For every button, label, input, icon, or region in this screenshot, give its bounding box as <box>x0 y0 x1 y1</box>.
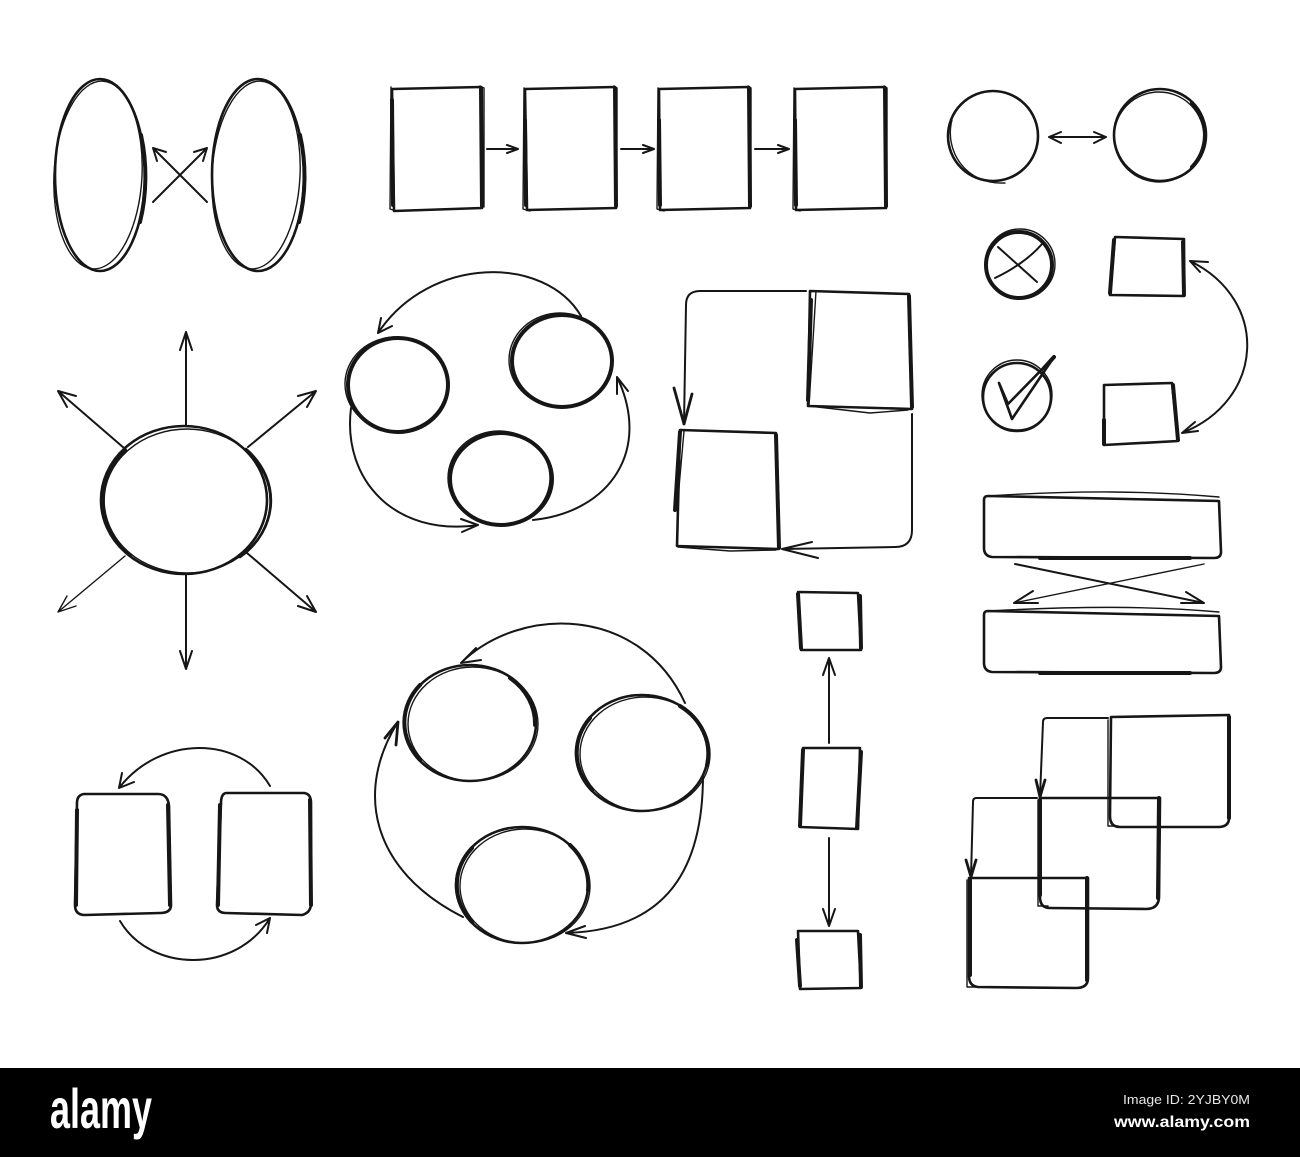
crossed arrows <box>1014 564 1204 603</box>
lower connector arrow <box>971 798 1037 877</box>
bottom box <box>797 931 861 989</box>
central oval <box>101 426 271 574</box>
middle square <box>1038 798 1160 909</box>
logo wordmark: alamy <box>50 1077 152 1140</box>
diagram: two boxes with curved arrow <box>1104 237 1247 445</box>
arrow lower right <box>247 553 316 612</box>
arrow upper left <box>58 391 124 448</box>
top square <box>1108 715 1229 827</box>
bottom square <box>967 878 1088 988</box>
left arc arrow <box>350 408 478 532</box>
website: www.alamy.com <box>1113 1114 1250 1131</box>
lower box <box>675 430 779 551</box>
step box 2 <box>523 86 617 211</box>
ring 2 <box>576 695 710 811</box>
image id: Image ID: 2YJBY0M <box>1123 1092 1250 1107</box>
upper connector arrow <box>684 291 806 424</box>
double arrow <box>1049 132 1106 143</box>
up arrow <box>823 658 835 743</box>
right arc arrow <box>533 377 629 520</box>
diagram: four-step process row <box>390 86 887 211</box>
lower box <box>1104 383 1178 445</box>
upper box <box>808 291 912 413</box>
crossed arrows <box>153 148 207 202</box>
arrow 2 <box>621 145 654 153</box>
bottom arc arrow <box>120 918 270 960</box>
top arrow head <box>1036 780 1045 797</box>
arrow lower left <box>58 556 125 612</box>
footer bar <box>0 1068 1300 1157</box>
lower arrow head <box>966 860 976 877</box>
upper bar <box>984 492 1221 558</box>
diagram: two wide bars with crossed arrows <box>984 492 1221 673</box>
diagram: wide three-ring cycle <box>375 624 710 943</box>
diagram: staircase of overlapping squares <box>966 715 1229 988</box>
diagram: two circles with double arrow <box>948 89 1206 183</box>
arrow upper right <box>248 391 316 447</box>
top arc arrow <box>378 272 581 333</box>
diagram: two large boxes with connector arrows <box>674 291 912 558</box>
diagram: three-circle cycle <box>345 272 629 532</box>
top box <box>798 592 861 650</box>
left oval <box>49 79 147 271</box>
down arrow <box>823 838 835 926</box>
right oval <box>207 79 305 271</box>
lower bar <box>984 607 1221 673</box>
diagram: central oval with six radiating arrows <box>58 332 316 669</box>
top arc arrow <box>119 748 270 788</box>
top connector arrow <box>1040 718 1108 797</box>
circle 3 <box>448 431 552 525</box>
circle 1 <box>345 337 448 432</box>
diagram: two ovals with crossed arrows <box>49 79 305 271</box>
curved arrow <box>1182 261 1247 433</box>
left circle <box>948 91 1038 183</box>
middle box <box>800 748 861 829</box>
arrow down <box>180 574 192 669</box>
ring 1 <box>404 665 538 781</box>
right circle <box>1114 89 1206 182</box>
left arc arrow <box>375 722 463 917</box>
diagram: vertical three-box chain <box>797 592 861 989</box>
step box 4 <box>793 86 887 211</box>
arrow up <box>180 332 192 425</box>
arrow 1 <box>487 145 518 153</box>
step box 3 <box>657 86 751 211</box>
right arc arrow <box>566 775 703 938</box>
ring 3 <box>456 827 590 943</box>
diagram: two boxes with arc arrows <box>75 748 311 960</box>
left box <box>75 794 171 915</box>
top arc arrow <box>461 624 685 703</box>
right box <box>217 793 311 915</box>
arrow 3 <box>755 145 789 153</box>
upper arrow head <box>674 388 692 424</box>
circle 2 <box>509 313 612 407</box>
step box 1 <box>390 86 484 211</box>
icon: cross in circle <box>985 229 1055 299</box>
lower connector arrow <box>782 414 912 558</box>
upper box <box>1110 237 1184 296</box>
icon: check mark in circle <box>982 357 1054 431</box>
left arc arrow head <box>385 722 398 745</box>
